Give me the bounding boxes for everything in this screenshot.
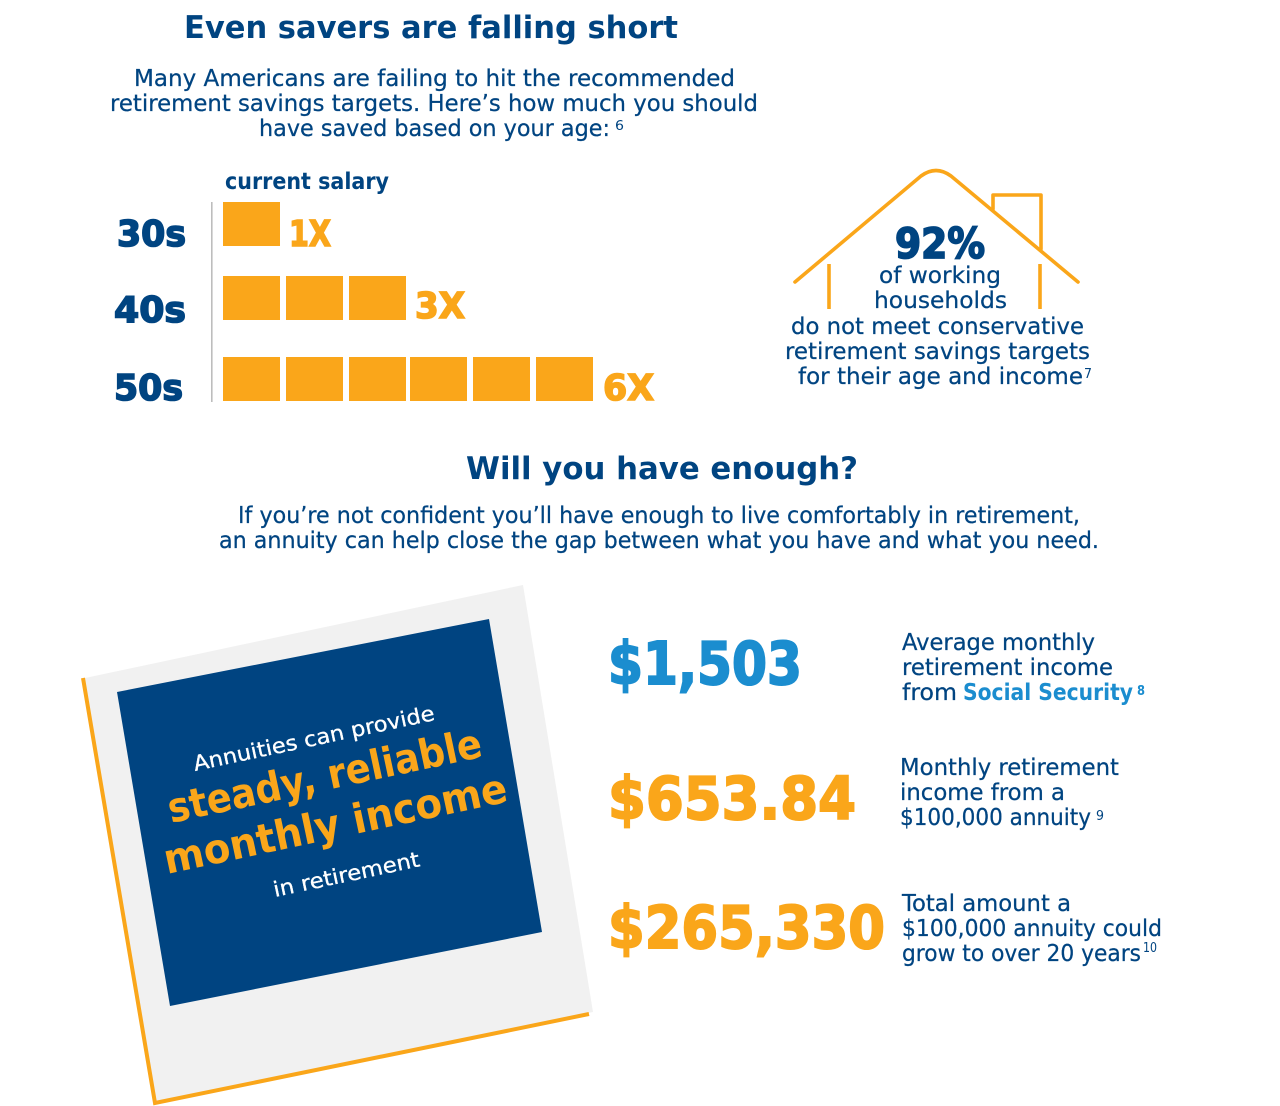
intro text block: an annuity can help close the gap between what you have and what you need. xyxy=(219,528,1099,554)
stat description: 7 xyxy=(1084,367,1092,382)
row: 30s: 30s xyxy=(117,214,186,255)
stat: annuity growth: $100,000 annuity could xyxy=(902,916,1162,942)
stat: annuity growth: grow to over 20 years xyxy=(902,941,1141,967)
row: 40s: 3X xyxy=(415,286,465,327)
stat: social security xyxy=(608,629,1145,706)
card text: steady, reliable xyxy=(163,719,486,833)
row: 50s xyxy=(114,357,654,409)
stat description: retirement savings targets xyxy=(785,339,1090,365)
stat: social security: $1,503 xyxy=(608,629,802,698)
intro text block: retirement savings targets. Here’s how much you should xyxy=(110,91,758,117)
stat: monthly annuity income: $100,000 annuity xyxy=(900,805,1091,831)
callout: 92 percent house xyxy=(785,170,1092,390)
panel: will you have enough xyxy=(219,451,1099,554)
stat description: do not meet conservative xyxy=(791,314,1084,340)
stat: annuity growth: $265,330 xyxy=(608,893,885,962)
stat description: households xyxy=(874,288,1007,314)
stat: social security: from xyxy=(902,680,957,706)
row: 50s: 50s xyxy=(114,368,183,409)
panel: savers section xyxy=(110,10,1092,409)
icon: house outline xyxy=(795,170,1078,309)
stat: 92%: 92% xyxy=(895,219,985,268)
card text: Annuities can provide xyxy=(191,701,437,776)
card text: monthly income xyxy=(159,764,511,884)
stat: monthly annuity income: $653.84 xyxy=(608,764,856,833)
intro text block: 6 xyxy=(615,119,624,134)
intro text block xyxy=(219,503,1099,554)
row: 30s xyxy=(117,202,331,255)
stat: monthly annuity income: 9 xyxy=(1096,809,1104,824)
card text xyxy=(159,701,511,902)
heading: will you have enough: Will you have enough? xyxy=(466,451,858,487)
intro text block xyxy=(110,66,758,142)
stat description: of working xyxy=(879,263,1001,289)
row: 40s: 40s xyxy=(114,290,186,331)
row: 50s: 6X xyxy=(603,368,654,409)
panel: photo card xyxy=(83,585,593,1103)
card background xyxy=(85,585,593,1103)
bar chart: salary multiples by age xyxy=(114,169,654,409)
card photo area xyxy=(117,619,542,1006)
title: even savers: Even savers are falling short xyxy=(184,10,678,46)
chart heading: current salary: current salary xyxy=(225,169,389,195)
stat: monthly annuity income: income from a xyxy=(900,780,1065,806)
stat description: for their age and income xyxy=(798,364,1083,390)
stat: social security: 8 xyxy=(1137,684,1145,699)
stat: annuity growth: Total amount a xyxy=(901,891,1071,917)
row: 40s xyxy=(114,276,465,331)
intro text block: have saved based on your age: xyxy=(259,116,610,142)
intro text block: If you’re not confident you’ll have enough to live comfortably in retirement, xyxy=(238,503,1080,529)
stat: social security: Social Security xyxy=(963,680,1133,706)
intro text block: Many Americans are failing to hit the recommended xyxy=(134,66,735,92)
stat: annuity growth: 10 xyxy=(1143,941,1157,956)
stat: monthly annuity income xyxy=(608,755,1119,833)
stat: social security: retirement income xyxy=(902,655,1113,681)
stat: social security: Average monthly xyxy=(902,630,1095,656)
row: 30s: 1X xyxy=(289,214,331,255)
card orange edge xyxy=(83,678,589,1103)
stat: annuity growth xyxy=(608,891,1162,967)
stat description xyxy=(785,263,1092,390)
chart axis xyxy=(211,202,213,402)
card text: in retirement xyxy=(271,847,422,902)
stat: monthly annuity income: Monthly retirement xyxy=(900,755,1119,781)
panel: income figures xyxy=(608,629,1162,967)
